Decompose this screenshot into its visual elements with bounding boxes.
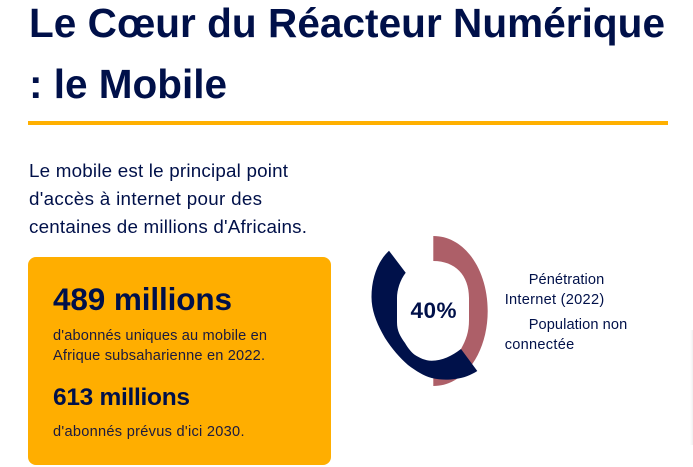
intro text: Le mobile est le principal point [29,160,289,181]
donut segment: navy [372,251,477,380]
title: : le Mobile [29,61,227,107]
stat description: 489 millions: d'abonnés uniques au mobile en [53,328,267,344]
legend item: unconnected: Population non [529,317,627,333]
stat description: 489 millions: Afrique subsaharienne en 2022. [53,348,265,364]
legend item: penetration: Internet (2022) [505,292,604,308]
intro text: centaines de millions d'Africains. [29,216,307,237]
panel: key figures [28,257,331,465]
title [29,0,665,107]
title: Le Cœur du Réacteur Numérique [29,0,665,46]
stat: 613 millions: 613 millions [53,384,190,411]
donut center value: 40% [410,298,456,323]
stat: 489 millions: 489 millions [53,281,232,317]
donut segment: rose [433,236,488,386]
intro text [29,160,307,237]
legend item: penetration: Pénétration [529,272,604,288]
donut chart [372,236,488,386]
stat description: 489 millions [53,328,267,364]
legend item: penetration [505,272,604,308]
legend item: unconnected: connectée [505,337,574,353]
legend item: unconnected [505,317,627,353]
intro text: d'accès à internet pour des [29,188,262,209]
legend [505,272,627,353]
stat description: 613 millions: d'abonnés prévus d'ici 2030. [53,424,244,440]
title underline [28,121,668,125]
